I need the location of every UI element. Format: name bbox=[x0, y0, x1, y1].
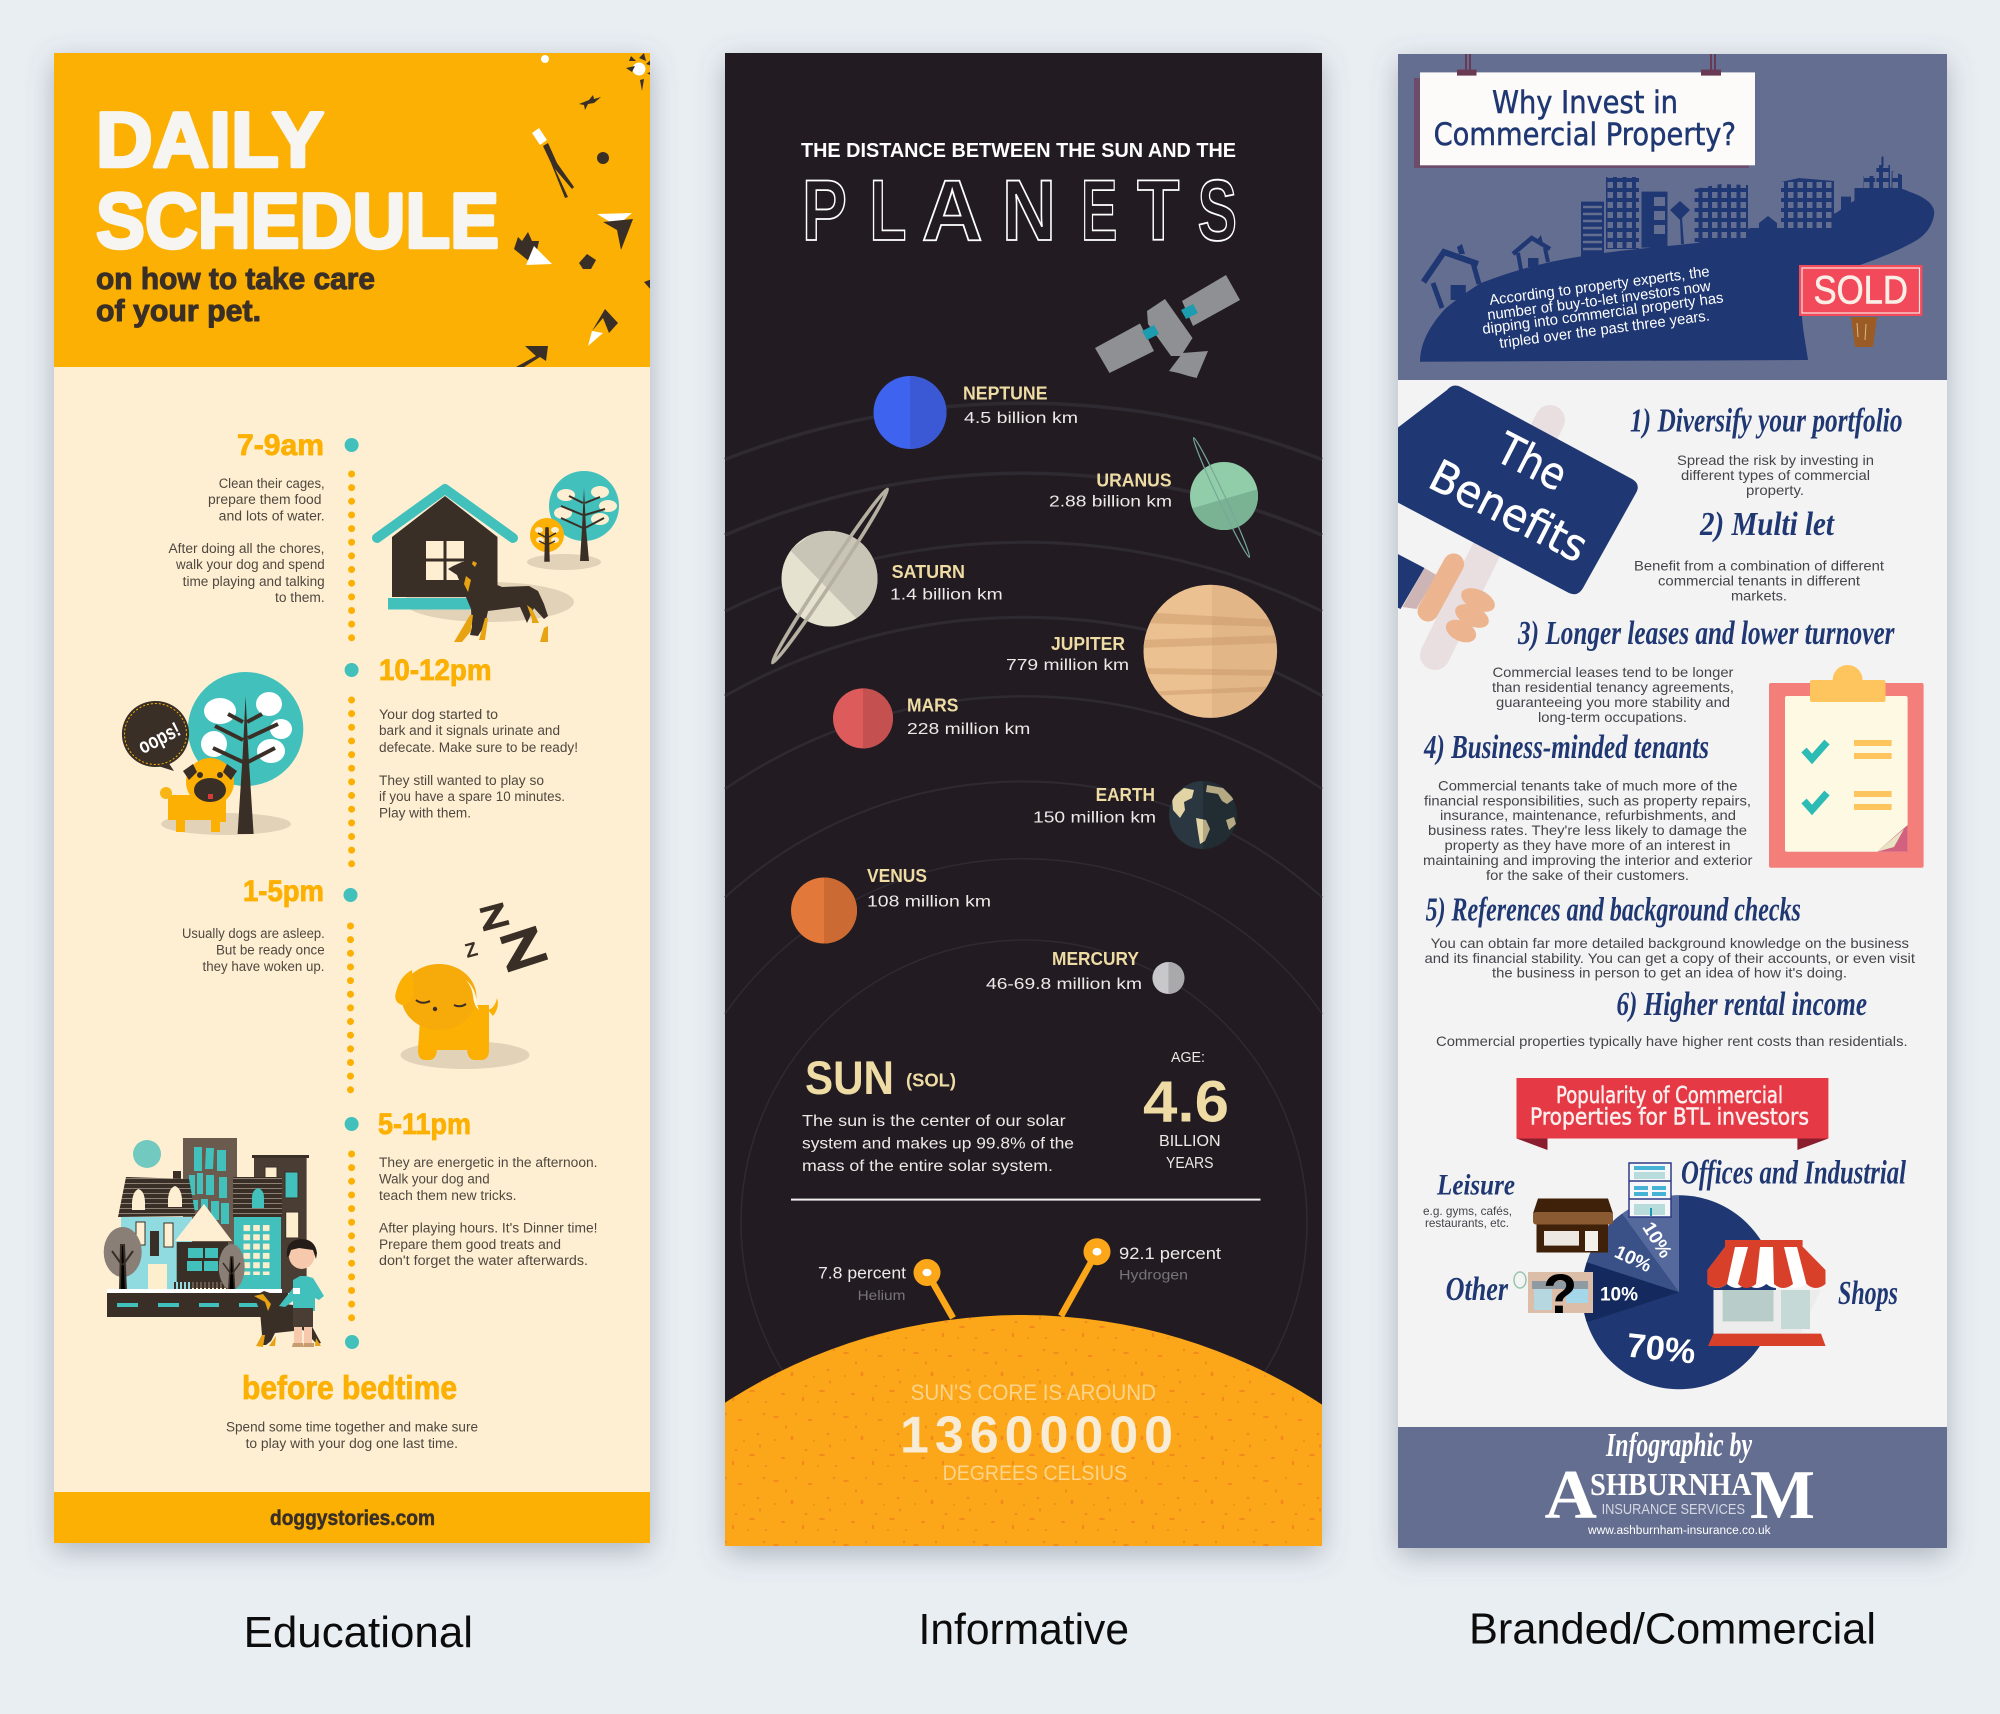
title: daily schedule: SCHEDULE bbox=[96, 176, 499, 264]
label: mercury: 46-69.8 million km bbox=[986, 976, 1142, 993]
benefit 5 bbox=[1424, 892, 1915, 981]
text: sun description bbox=[802, 1113, 1074, 1175]
benefit 3: Commercial leases tend to be longer bbox=[1492, 664, 1734, 680]
panel: branded commercial property bbox=[1340, 54, 1947, 1548]
text: midday: if you have a spare 10 minutes. bbox=[379, 789, 565, 804]
text: midday: bark and it signals urinate and bbox=[379, 723, 560, 738]
text: midday: They still wanted to play so bbox=[379, 773, 544, 788]
skyline hill illustration bbox=[1420, 157, 1934, 362]
benefit 2: commercial tenants in different bbox=[1658, 573, 1860, 589]
label: saturn: 1.4 billion km bbox=[890, 587, 1003, 604]
text: afternoon nap bbox=[182, 926, 325, 974]
pie label: leisure: Leisure bbox=[1436, 1169, 1515, 1202]
icon: satellite bbox=[1095, 275, 1240, 378]
caption: branded commercial: Branded/Commercial bbox=[1469, 1605, 1876, 1654]
label: jupiter: 779 million km bbox=[1006, 657, 1129, 674]
text: morning chores: and lots of water. bbox=[219, 508, 325, 524]
heading: before bedtime: before bedtime bbox=[242, 1369, 457, 1406]
benefit 4: Commercial tenants take of much more of the bbox=[1438, 778, 1738, 794]
text: sun description: system and makes up 99.8% of the bbox=[802, 1136, 1074, 1152]
pie chart: 10% bbox=[1600, 1284, 1638, 1306]
timeline line dots bbox=[350, 474, 352, 1319]
benefit 4: financial responsibilities, such as property repairs, bbox=[1424, 793, 1751, 809]
footer band with website bbox=[54, 1492, 650, 1543]
speech bubble label: oops! bbox=[135, 718, 184, 759]
title: planets outline: T bbox=[1137, 163, 1180, 259]
sun disc bbox=[725, 1315, 1322, 1546]
text: evening: teach them new tricks. bbox=[379, 1188, 516, 1203]
illustration: house, dog and trees bbox=[377, 471, 619, 642]
title: planets outline: A bbox=[922, 163, 983, 259]
illustration: pug, tree and speech bubble bbox=[122, 672, 303, 835]
text: afternoon nap: they have woken up. bbox=[202, 959, 324, 974]
icon: other store with question mark: ? bbox=[1543, 1262, 1577, 1325]
stat: sun core temperature: DEGREES CELSIUS bbox=[943, 1462, 1127, 1485]
header band bbox=[54, 53, 650, 367]
benefit 1: property. bbox=[1746, 482, 1804, 498]
title: planets outline: P bbox=[802, 163, 847, 259]
benefit 1: different types of commercial bbox=[1681, 467, 1870, 483]
label: mercury: MERCURY bbox=[1052, 949, 1139, 969]
text: evening bbox=[379, 1155, 598, 1268]
planet: saturn with ring bbox=[768, 487, 892, 665]
sleeping Zs: Z bbox=[475, 896, 512, 938]
subtitle bbox=[96, 261, 375, 328]
title: daily schedule bbox=[96, 96, 499, 264]
benefit 5: You can obtain far more detailed background knowledge on the business bbox=[1431, 935, 1909, 951]
sold sign bbox=[1799, 265, 1922, 347]
label: jupiter: JUPITER bbox=[1051, 634, 1125, 654]
pie chart: 10% bbox=[1611, 1242, 1655, 1277]
text: morning chores: After doing all the chores, bbox=[168, 541, 324, 556]
label: uranus bbox=[1049, 471, 1172, 511]
text: sun description: mass of the entire solar system. bbox=[802, 1158, 1053, 1175]
planet: mars bbox=[833, 688, 894, 750]
label: hydrogen share: Hydrogen bbox=[1119, 1267, 1188, 1283]
benefit 4: 4) Business-minded tenants bbox=[1423, 729, 1709, 766]
icon: other store with question mark bbox=[1514, 1262, 1593, 1325]
label: saturn: SATURN bbox=[892, 562, 965, 582]
benefit 3: long-term occupations. bbox=[1538, 709, 1687, 725]
pie label: leisure: restaurants, etc. bbox=[1425, 1216, 1509, 1230]
stat: age of the sun: 4.6 bbox=[1143, 1070, 1229, 1135]
pie chart bbox=[1582, 1195, 1776, 1389]
benefit 5: the business in person to get an idea of how it's doing. bbox=[1492, 965, 1847, 981]
benefit 2 bbox=[1634, 506, 1884, 604]
benefits sign with hand bbox=[1398, 386, 1638, 670]
text: evening: Walk your dog and bbox=[379, 1172, 490, 1187]
text: midday: Your dog started to bbox=[379, 707, 498, 722]
benefit 3: than residential tenancy agreements, bbox=[1492, 679, 1734, 695]
banner: popularity bbox=[1516, 1078, 1828, 1150]
label: saturn bbox=[890, 562, 1003, 604]
benefit 4 bbox=[1423, 729, 1753, 883]
pin: hydrogen bbox=[1061, 1238, 1110, 1316]
divider bbox=[791, 1199, 1260, 1201]
text: sun description: The sun is the center of our solar bbox=[802, 1113, 1066, 1130]
header band bbox=[1398, 54, 1947, 380]
footer band with website: doggystories.com bbox=[270, 1507, 435, 1530]
footer band with logo: SHBURNHA bbox=[1590, 1466, 1752, 1502]
text: morning chores: prepare them food bbox=[208, 492, 322, 507]
pie label: leisure: e.g. gyms, cafés, bbox=[1423, 1204, 1512, 1218]
heading: 10-12pm: 10-12pm bbox=[379, 654, 492, 687]
benefit 4: insurance, maintenance, refurbishments, and bbox=[1440, 807, 1736, 823]
text: midday: Play with them. bbox=[379, 806, 471, 820]
illustration: city street with boy and dog bbox=[104, 1138, 324, 1347]
text: property experts quote bbox=[1481, 263, 1724, 352]
text: morning chores: time playing and talking bbox=[183, 574, 325, 589]
stat: sun core temperature: SUN'S CORE IS AROUND bbox=[911, 1380, 1156, 1405]
label: uranus: 2.88 billion km bbox=[1049, 494, 1172, 511]
sleeping Zs bbox=[463, 896, 552, 982]
planet: venus bbox=[791, 877, 858, 945]
heading: sun: SUN bbox=[805, 1051, 894, 1104]
icon: shop with awning bbox=[1707, 1240, 1826, 1346]
label: neptune: NEPTUNE bbox=[963, 384, 1048, 404]
stat: age of the sun bbox=[1143, 1049, 1229, 1172]
caption: educational: Educational bbox=[244, 1608, 473, 1657]
title: daily schedule: DAILY bbox=[96, 96, 324, 184]
panel: educational daily schedule bbox=[54, 53, 652, 1543]
text: morning chores: walk your dog and spend bbox=[175, 557, 325, 572]
text: midday: defecate. Make sure to be ready! bbox=[379, 740, 578, 755]
label: mars: MARS bbox=[907, 696, 958, 716]
benefit 4: for the sake of their customers. bbox=[1486, 867, 1689, 883]
stat: age of the sun: BILLION bbox=[1159, 1133, 1221, 1150]
label: helium share bbox=[818, 1264, 906, 1303]
benefit 1: Spread the risk by investing in bbox=[1677, 452, 1874, 468]
planet: neptune bbox=[874, 376, 947, 449]
pie label: other: Other bbox=[1446, 1271, 1509, 1308]
sleeping Zs: Z bbox=[493, 916, 552, 982]
title: planets outline: E bbox=[1081, 163, 1117, 259]
heading: sun: (SOL) bbox=[906, 1071, 956, 1091]
stat: sun core temperature bbox=[900, 1380, 1173, 1485]
benefit 1: 1) Diversify your portfolio bbox=[1630, 402, 1902, 440]
banner: popularity: Popularity of Commercial bbox=[1556, 1083, 1783, 1109]
benefit 6 bbox=[1436, 986, 1908, 1049]
title card with clips: Why Invest in bbox=[1492, 85, 1678, 121]
benefit 3 bbox=[1492, 615, 1895, 725]
benefit 4: maintaining and improving the interior and exterior bbox=[1423, 852, 1753, 868]
heading: 7-9am: 7-9am bbox=[237, 429, 324, 462]
benefit 2: markets. bbox=[1731, 588, 1787, 604]
label: venus: VENUS bbox=[867, 866, 927, 886]
text: evening: Prepare them good treats and bbox=[379, 1237, 561, 1252]
text: evening: After playing hours. It's Dinner time! bbox=[379, 1220, 598, 1236]
planet: mercury bbox=[1152, 961, 1185, 995]
heading: sun bbox=[805, 1051, 956, 1104]
text: property experts quote: dipping into commercial property has bbox=[1481, 289, 1724, 338]
title: planets outline: L bbox=[870, 163, 906, 259]
planet: jupiter bbox=[1144, 584, 1278, 718]
benefit 6: 6) Higher rental income bbox=[1616, 986, 1867, 1023]
benefits sign with hand: Benefits bbox=[1421, 450, 1596, 573]
text: morning chores: Clean their cages, bbox=[219, 476, 325, 491]
icon: coffee shop bbox=[1533, 1198, 1613, 1252]
text: bedtime: Spend some time together and make sure bbox=[226, 1420, 478, 1435]
label: helium share: 7.8 percent bbox=[818, 1264, 906, 1282]
stat: age of the sun: YEARS bbox=[1166, 1155, 1214, 1172]
pie label: offices and industrial: Offices and Industrial bbox=[1681, 1155, 1906, 1192]
timeline nodes bbox=[344, 438, 359, 1349]
heading: 1-5pm: 1-5pm bbox=[243, 875, 324, 908]
footer band with logo: INSURANCE SERVICES bbox=[1602, 1502, 1745, 1518]
text: property experts quote: number of buy-to-let investors now bbox=[1486, 278, 1712, 324]
stat: age of the sun: AGE: bbox=[1171, 1049, 1205, 1066]
planet: uranus bbox=[1190, 437, 1258, 558]
text: morning chores bbox=[168, 476, 325, 605]
benefit 2: 2) Multi let bbox=[1699, 506, 1835, 543]
pie label: leisure bbox=[1423, 1169, 1515, 1230]
title: planets outline bbox=[802, 163, 1237, 259]
benefit 4: property as they have more of an interest in bbox=[1444, 837, 1730, 853]
subtitle: on how to take care bbox=[96, 261, 375, 296]
caption: informative: Informative bbox=[918, 1605, 1129, 1654]
illustration: sleeping dog bbox=[395, 896, 552, 1069]
title card with clips: Commercial Property? bbox=[1434, 117, 1736, 153]
heading: 5-11pm: 5-11pm bbox=[378, 1108, 471, 1141]
footer band with logo: M bbox=[1750, 1457, 1815, 1534]
footer band with logo bbox=[1398, 1427, 1947, 1548]
label: mars bbox=[907, 696, 1030, 738]
text: afternoon nap: Usually dogs are asleep. bbox=[182, 926, 325, 941]
pin: helium bbox=[914, 1259, 953, 1318]
benefit 2: Benefit from a combination of different bbox=[1634, 558, 1884, 574]
pie label: shops: Shops bbox=[1838, 1275, 1898, 1312]
footer band with logo: www.ashburnham-insurance.co.uk bbox=[1587, 1525, 1771, 1537]
label: mercury bbox=[986, 949, 1142, 993]
benefits sign with hand: The bbox=[1487, 423, 1575, 501]
label: helium share: Helium bbox=[858, 1287, 905, 1303]
benefit 5: 5) References and background checks bbox=[1426, 892, 1801, 929]
label: venus: 108 million km bbox=[867, 894, 991, 911]
label: hydrogen share: 92.1 percent bbox=[1119, 1244, 1221, 1263]
text: evening: They are energetic in the afternoon. bbox=[379, 1155, 598, 1170]
banner: popularity: Properties for BTL investors bbox=[1530, 1104, 1809, 1130]
label: earth bbox=[1033, 785, 1156, 826]
label: earth: EARTH bbox=[1096, 785, 1155, 805]
benefit 4: business rates. They're less likely to damage the bbox=[1428, 822, 1747, 838]
subtitle: of your pet. bbox=[96, 293, 261, 328]
icon: office building bbox=[1629, 1163, 1671, 1217]
label: mars: 228 million km bbox=[907, 721, 1030, 738]
label: hydrogen share bbox=[1119, 1244, 1221, 1283]
stat: sun core temperature: 13600000 bbox=[900, 1406, 1173, 1464]
text: midday bbox=[379, 707, 578, 820]
decorative confetti icons bbox=[514, 53, 652, 367]
pie chart: 70% bbox=[1625, 1327, 1697, 1372]
label: uranus: URANUS bbox=[1096, 471, 1172, 491]
benefit 5: and its financial stability. You can get a copy of their accounts, or even visit bbox=[1424, 950, 1915, 966]
pie chart: 10% bbox=[1638, 1219, 1676, 1262]
title card with clips bbox=[1414, 54, 1755, 168]
orbit rings bbox=[725, 403, 1322, 1506]
text: property experts quote: According to property experts, the bbox=[1488, 263, 1711, 309]
text: property experts quote: tripled over the past three years. bbox=[1498, 307, 1711, 352]
title: planets outline: S bbox=[1198, 163, 1237, 259]
planet: earth bbox=[1169, 780, 1238, 850]
label: venus bbox=[867, 866, 991, 911]
panel: informative planets bbox=[725, 53, 1322, 1546]
benefit 6: Commercial properties typically have higher rent costs than residentials. bbox=[1436, 1033, 1908, 1049]
text: bedtime: to play with your dog one last time. bbox=[246, 1436, 458, 1451]
sleeping Zs: Z bbox=[463, 938, 480, 963]
title line: THE DISTANCE BETWEEN THE SUN AND THE bbox=[801, 140, 1236, 162]
label: earth: 150 million km bbox=[1033, 810, 1156, 826]
footer band with logo: Infographic by bbox=[1605, 1427, 1753, 1464]
footer band with logo: A bbox=[1544, 1457, 1597, 1534]
label: jupiter bbox=[1006, 634, 1129, 674]
label: neptune: 4.5 billion km bbox=[964, 410, 1078, 427]
title: planets outline: N bbox=[1002, 163, 1056, 259]
sold sign: SOLD bbox=[1814, 269, 1908, 313]
text: bedtime bbox=[226, 1420, 478, 1451]
text: evening: don't forget the water afterwards. bbox=[379, 1253, 588, 1268]
label: neptune bbox=[963, 384, 1078, 427]
text: afternoon nap: But be ready once bbox=[216, 942, 325, 957]
benefit 3: guaranteeing you more stability and bbox=[1496, 694, 1730, 710]
benefit 1 bbox=[1630, 402, 1902, 498]
text: morning chores: to them. bbox=[275, 590, 325, 605]
icon: clipboard checklist bbox=[1769, 665, 1924, 868]
